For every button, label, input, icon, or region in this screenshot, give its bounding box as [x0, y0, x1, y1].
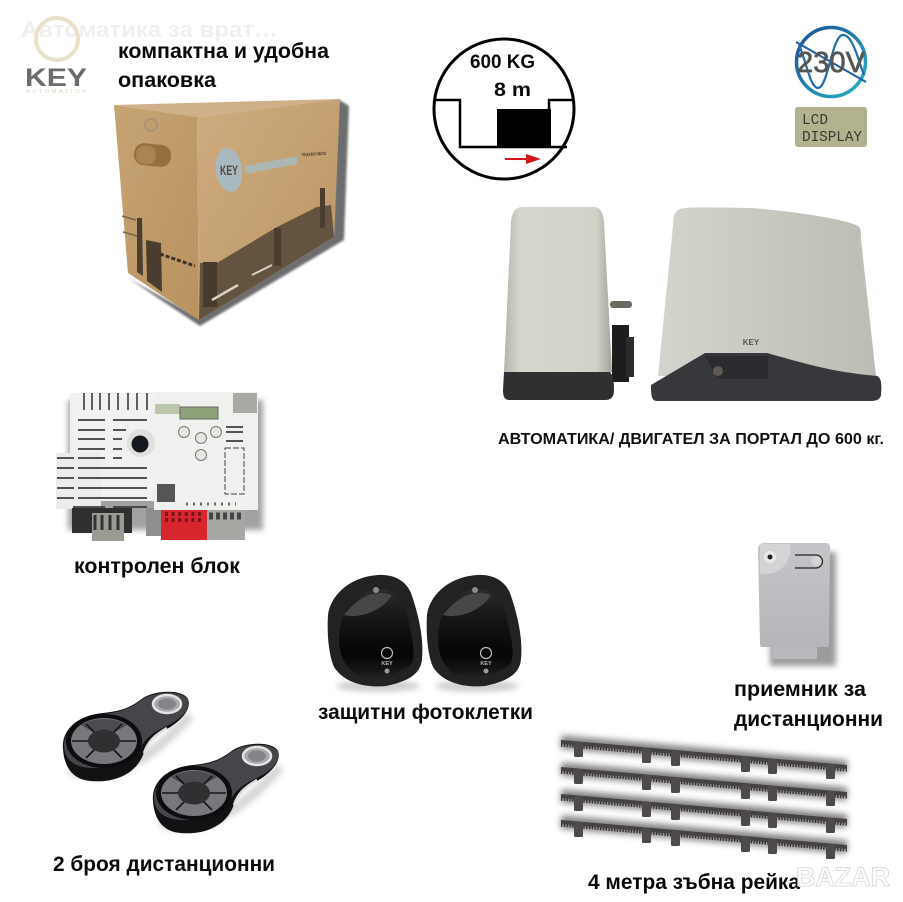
illustration: receiver [758, 543, 836, 666]
label: photocells: защитни фотоклетки [318, 701, 533, 724]
icon: gate 600 KG 8 m: 8 m [494, 80, 531, 101]
label: receiver: дистанционни [734, 708, 883, 731]
illustration: motor front view [651, 207, 881, 401]
heading: packaging label: компактна и удобна [118, 40, 329, 63]
illustration: gear racks [561, 740, 847, 859]
label: receiver [734, 678, 883, 731]
watermark: page title: Автоматика за врат… [21, 17, 278, 42]
illustration: control board [56, 392, 263, 541]
illustration: cardboard box: keyautomation.it [302, 151, 327, 158]
icon: 230V [796, 28, 866, 96]
illustration: cardboard box [114, 99, 349, 326]
label: gear rack: 4 метра зъбна рейка [588, 871, 800, 894]
heading: packaging label [118, 40, 329, 92]
illustration: motor side view [503, 207, 634, 400]
label: receiver: приемник за [734, 678, 866, 701]
watermark: Bazar: BAZAR [796, 862, 890, 892]
icon: LCD display: DISPLAY [802, 129, 862, 146]
logo: KEY Automation [25, 18, 87, 95]
icon: gate 600 KG 8 m: 600 KG [470, 52, 535, 73]
illustration: remote controls [63, 692, 280, 833]
label: control block: контролен блок [74, 555, 240, 578]
illustration: cardboard box: KEY [220, 162, 238, 178]
illustration: photocells [328, 575, 521, 692]
logo: KEY Automation: AUTOMATION [26, 89, 86, 95]
heading: packaging label: опаковка [118, 69, 216, 92]
logo: KEY Automation: KEY [25, 64, 87, 92]
icon: gate 600 KG 8 m [434, 39, 574, 179]
icon: LCD display: LCD [802, 112, 828, 129]
label: motor caption: АВТОМАТИКА/ ДВИГАТЕЛ ЗА ПОРТАЛ ДО 600 кг. [498, 431, 884, 448]
label: 2 remotes: 2 броя дистанционни [53, 853, 275, 876]
illustration: motor front view: KEY [743, 338, 760, 347]
icon: 230V: 230V [797, 47, 866, 79]
icon: LCD display [795, 107, 867, 147]
